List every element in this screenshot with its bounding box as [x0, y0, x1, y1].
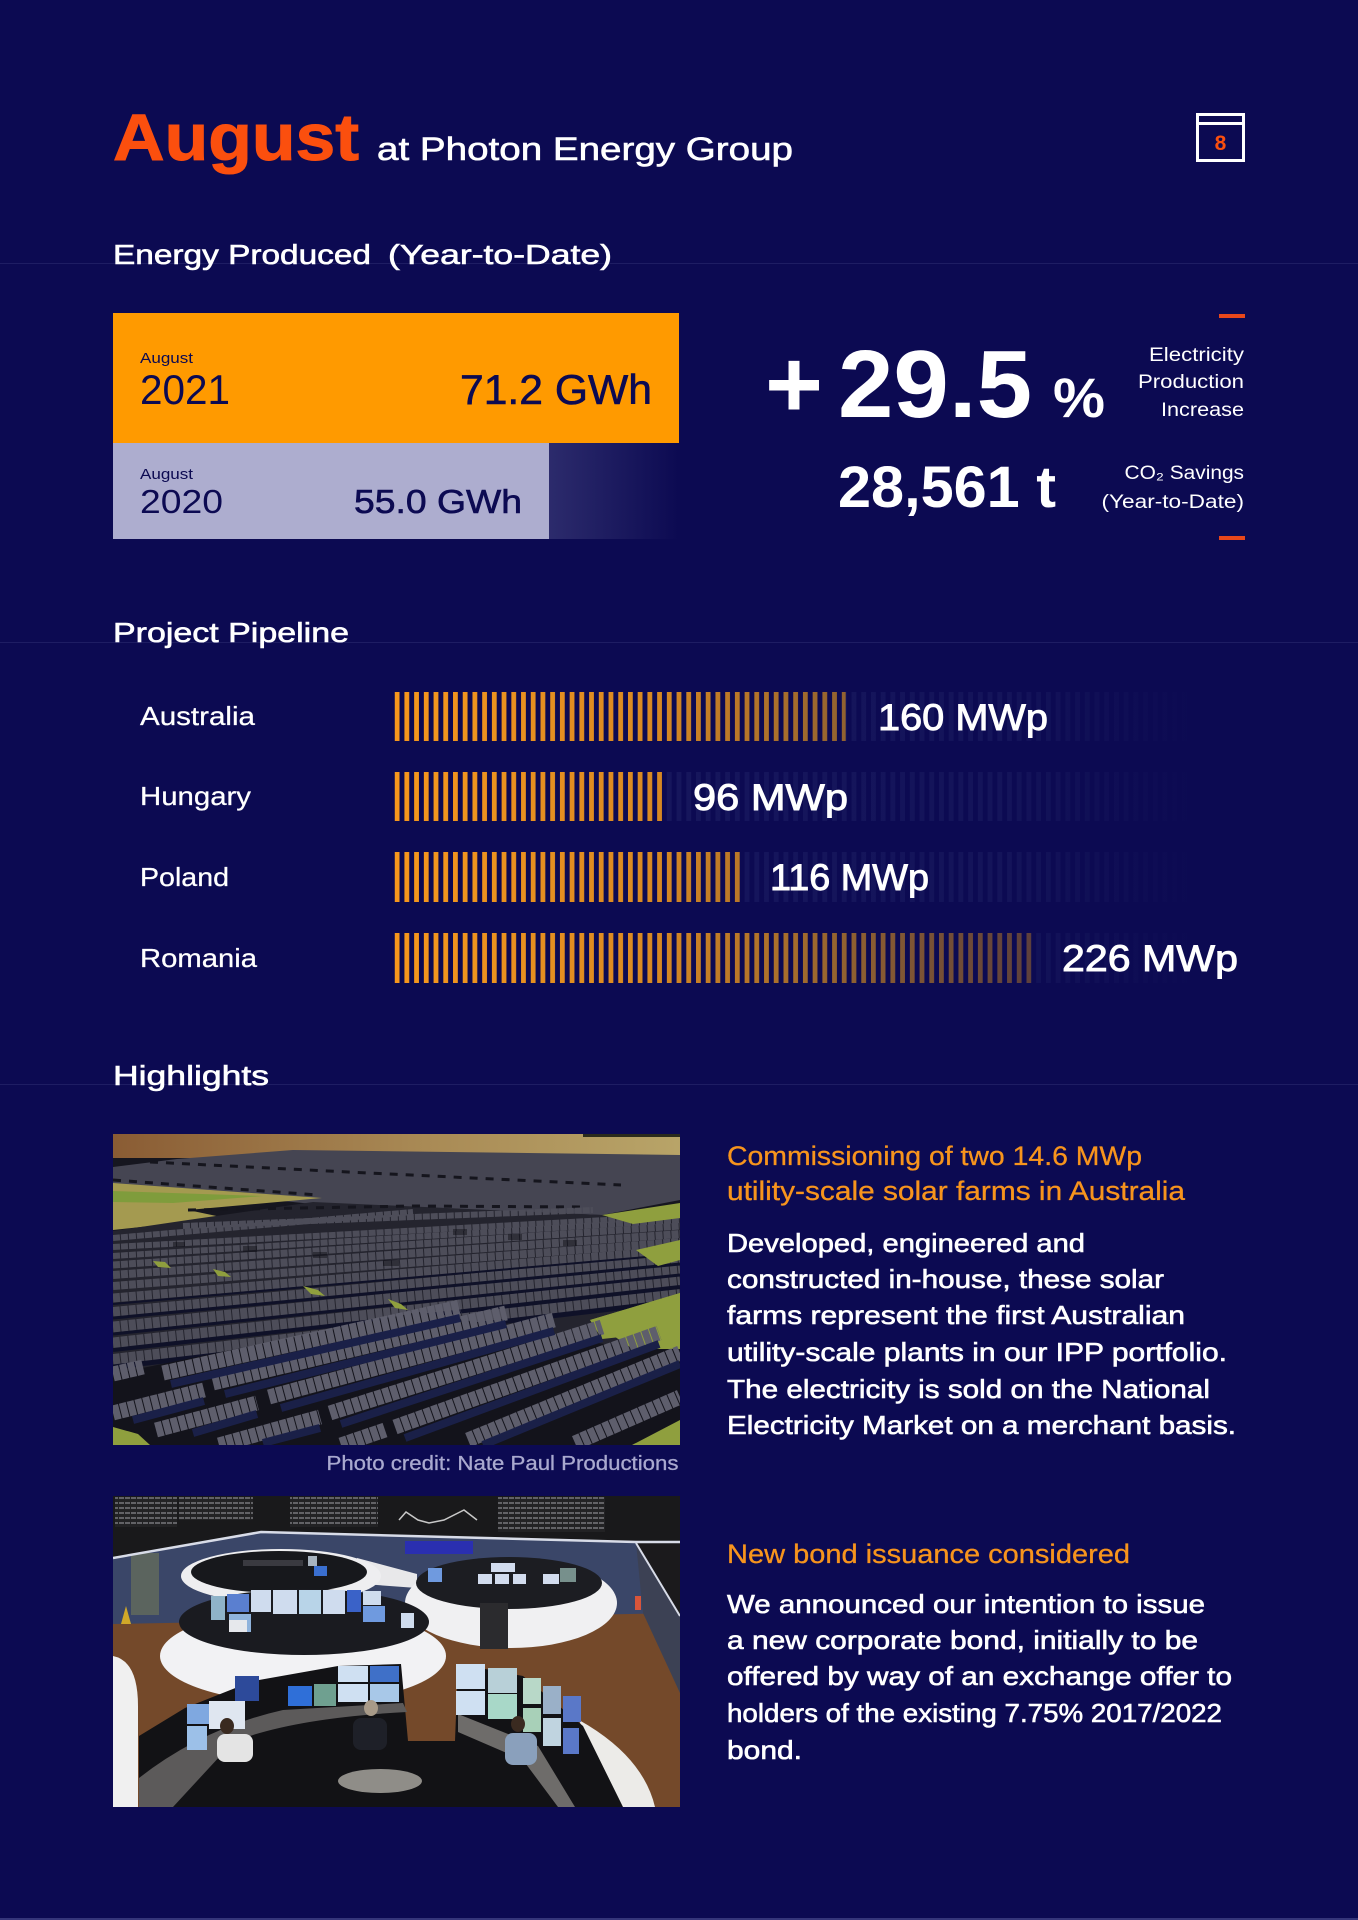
heading: energy produced: Energy Produced: [113, 239, 371, 270]
title: [113, 100, 793, 174]
row: Romania: Romania: [140, 943, 258, 973]
body: commissioning details: [727, 1228, 1236, 1440]
bar: August 2021: 71.2 GWh: [460, 366, 652, 413]
heading: commissioning: [727, 1141, 1186, 1206]
label: electricity production increase: Electricity: [1149, 345, 1245, 366]
bar: August 2020: August: [140, 466, 194, 483]
body: commissioning details: utility-scale plants in our IPP portfolio.: [727, 1337, 1227, 1367]
body: commissioning details: constructed in-house, these solar: [727, 1264, 1164, 1294]
row: Poland: [140, 852, 1200, 902]
row: Hungary: Hungary: [140, 781, 251, 811]
body: commissioning details: farms represent the first Australian: [727, 1300, 1185, 1330]
label: CO2 savings: CO₂ Savings: [1124, 463, 1244, 484]
row: Romania: [140, 933, 1238, 983]
label: CO2 savings: [1102, 463, 1244, 513]
caption: photo credit: Photo credit: Nate Paul Productions: [326, 1453, 678, 1475]
row: Romania: 226 MWp: [1062, 938, 1238, 979]
bar: August 2021: August: [140, 350, 194, 367]
bar: August 2020: [113, 443, 679, 539]
bar: August 2021: 2021: [140, 366, 230, 413]
stat: production increase: 29.5: [838, 331, 1032, 438]
body: bond details: offered by way of an exchange offer to: [727, 1661, 1232, 1691]
row: Poland: 116 MWp: [770, 857, 929, 898]
heading: highlights: Highlights: [113, 1060, 269, 1091]
chart: project pipeline bars: [140, 692, 1238, 983]
stat: production increase: %: [1053, 366, 1105, 429]
label: electricity production increase: Production: [1138, 372, 1244, 393]
row: Australia: [140, 692, 1200, 741]
body: bond details: bond.: [727, 1735, 802, 1765]
body: commissioning details: Developed, engineered and: [727, 1228, 1085, 1258]
body: commissioning details: Electricity Market on a merchant basis.: [727, 1410, 1236, 1440]
heading: project pipeline: Project Pipeline: [113, 617, 349, 648]
bar: August 2020: 55.0 GWh: [354, 483, 522, 520]
panel: energy comparison bars: [113, 313, 679, 539]
body: commissioning details: The electricity is sold on the National: [727, 1374, 1210, 1404]
title: August: August: [113, 100, 359, 174]
body: bond details: a new corporate bond, initially to be: [727, 1625, 1198, 1655]
label: electricity production increase: Increase: [1161, 400, 1244, 421]
body: bond details: [727, 1589, 1232, 1765]
bar: August 2021: [113, 313, 679, 443]
heading: energy produced: (Year-to-Date): [388, 239, 612, 270]
row: Poland: Poland: [140, 862, 229, 892]
row: Australia: 160 MWp: [878, 697, 1048, 738]
label: CO2 savings: (Year-to-Date): [1102, 492, 1244, 513]
photo: solar farm aerial view: [113, 1134, 680, 1445]
body: bond details: holders of the existing 7.75% 2017/2022: [727, 1698, 1222, 1728]
text block: bond issuance: [727, 1539, 1232, 1765]
stat: CO2 savings: 28,561 t: [838, 455, 1056, 520]
text block: Australian solar farms: [727, 1141, 1236, 1440]
icon: calendar day 8: 8: [1215, 132, 1227, 155]
heading: commissioning: utility-scale solar farms in Australia: [727, 1176, 1186, 1206]
icon: calendar day 8: [1197, 114, 1244, 160]
row: Australia: Australia: [140, 701, 256, 731]
row: Hungary: [140, 772, 1200, 821]
title: subtitle: at Photon Energy Group: [377, 131, 793, 167]
label: electricity production increase: [1138, 345, 1245, 421]
photo: stock exchange trading floor: [113, 1496, 680, 1807]
bar: August 2020: 2020: [140, 483, 223, 520]
heading: bond issuance: New bond issuance considered: [727, 1539, 1130, 1569]
stat: production increase: +: [765, 331, 823, 438]
body: bond details: We announced our intention to issue: [727, 1589, 1205, 1619]
row: Hungary: 96 MWp: [693, 777, 848, 818]
heading: commissioning: Commissioning of two 14.6 MWp: [727, 1141, 1142, 1171]
panel: key statistics: [765, 314, 1245, 540]
